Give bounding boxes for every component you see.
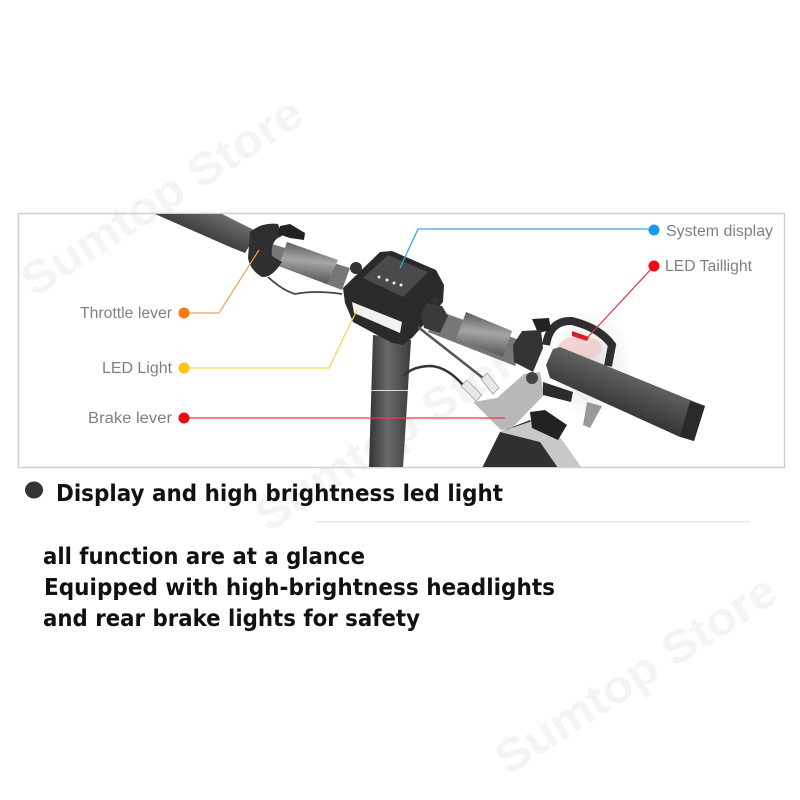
display unit (343, 251, 444, 345)
callout: LED taillight (588, 258, 753, 337)
right collar and button (513, 318, 551, 384)
wire (268, 277, 342, 294)
body text: and rear brake lights for safety (43, 606, 420, 632)
callout: LED light: LED Light (102, 360, 173, 377)
right grip (546, 347, 705, 441)
callout: brake lever (88, 410, 505, 427)
battery dots (378, 276, 402, 286)
heading: Display and high brightness led light (56, 481, 503, 507)
grip end (680, 401, 705, 441)
LED window (352, 302, 402, 333)
watermark: center: Sumtop Store (245, 321, 546, 541)
body text: all function are at a glance (43, 544, 365, 570)
right tube (428, 312, 517, 366)
left grip (155, 214, 258, 253)
red taillight (572, 331, 589, 341)
callout: system display: System display (666, 223, 773, 240)
taillight housing (546, 321, 612, 366)
divider (316, 521, 750, 522)
panel: handlebar diagram (18, 214, 784, 468)
display clamp screw (350, 262, 362, 274)
illustration: scooter handlebar (155, 214, 705, 468)
brake lever (473, 372, 544, 430)
callout: brake lever: Brake lever (88, 410, 172, 427)
connectors (461, 373, 499, 401)
stem (369, 335, 411, 468)
left tube (268, 242, 350, 290)
lever mount (530, 382, 602, 440)
display top face (363, 255, 428, 297)
silver lever band (500, 420, 582, 468)
throttle clamp and lever (248, 224, 305, 277)
callout: LED light (102, 310, 357, 377)
callout: LED taillight: LED Taillight (665, 258, 753, 275)
body text: Equipped with high-brightness headlights (44, 575, 555, 601)
callout: throttle lever (80, 250, 259, 322)
callout: system display (400, 223, 773, 268)
right clamp (421, 303, 448, 333)
callout: throttle lever: Throttle lever (80, 305, 172, 322)
body text (43, 544, 555, 632)
watermark: top left: Sumtop Store (11, 86, 312, 306)
heading bullet (25, 482, 43, 498)
watermark: bottom right: Sumtop Store (485, 564, 786, 784)
dark lower display (482, 420, 558, 468)
cables (404, 327, 483, 385)
